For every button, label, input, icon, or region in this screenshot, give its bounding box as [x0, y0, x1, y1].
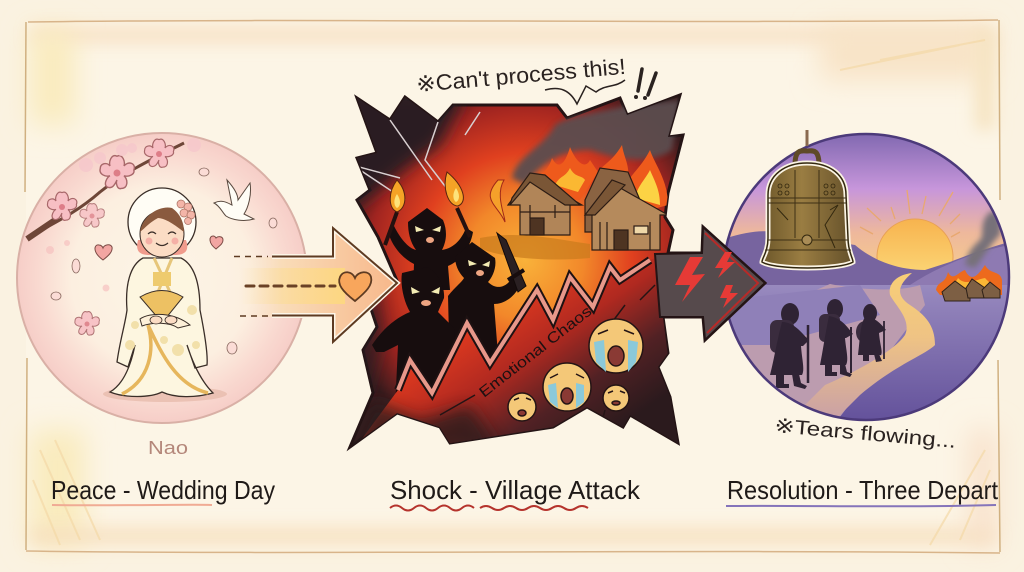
panel: peace circle [17, 133, 307, 423]
bride [103, 188, 227, 402]
annotation: tears flowing: ※Tears flowing... [774, 415, 957, 453]
icons: lightning [675, 257, 705, 302]
arrow: peace to shock [233, 228, 397, 342]
sky [730, 135, 1004, 261]
smoke [965, 211, 1001, 268]
travellers [770, 299, 886, 389]
pink circle background [17, 133, 307, 423]
golden road [805, 273, 935, 416]
label: Nao: Nao [148, 438, 188, 458]
heading: resolution: Resolution - Three Depart [727, 475, 999, 505]
crying faces [508, 319, 643, 421]
icon: heart [339, 272, 371, 301]
dove [214, 180, 254, 220]
dark cracked corner [357, 98, 472, 214]
label: emotional chaos: Emotional Chaos [476, 303, 595, 401]
sun [860, 190, 960, 270]
annotation: can't process this: ※Can't process this! [415, 54, 627, 97]
emotional zigzag line [398, 260, 650, 393]
attackers [372, 172, 526, 410]
attacker right with sword [448, 232, 527, 356]
burning village [936, 265, 1002, 301]
traveller three [856, 304, 886, 362]
traveller two [819, 299, 853, 377]
fan [140, 290, 183, 318]
dark lower cracks [440, 285, 655, 430]
attacker front [372, 270, 450, 393]
burning houses [508, 168, 668, 250]
lower chaos area [362, 258, 676, 443]
hills [728, 231, 1004, 285]
burst shape [350, 95, 765, 447]
annotation: can't process this [415, 54, 656, 104]
smoke [512, 100, 680, 185]
attacker eyes [411, 226, 490, 294]
cherry branch [27, 138, 201, 239]
flames [490, 145, 668, 222]
hearts and petals [46, 168, 277, 354]
temple bell [762, 130, 853, 268]
panel: resolution circle [720, 130, 1015, 430]
panel: shock jagged burst [345, 85, 765, 460]
attacker rear with torches [385, 172, 473, 290]
chaos arrow [655, 227, 765, 340]
ground [752, 285, 1008, 419]
heading: peace: Peace - Wedding Day [51, 475, 275, 505]
traveller one [770, 303, 809, 389]
heading: shock: Shock - Village Attack [390, 475, 641, 505]
